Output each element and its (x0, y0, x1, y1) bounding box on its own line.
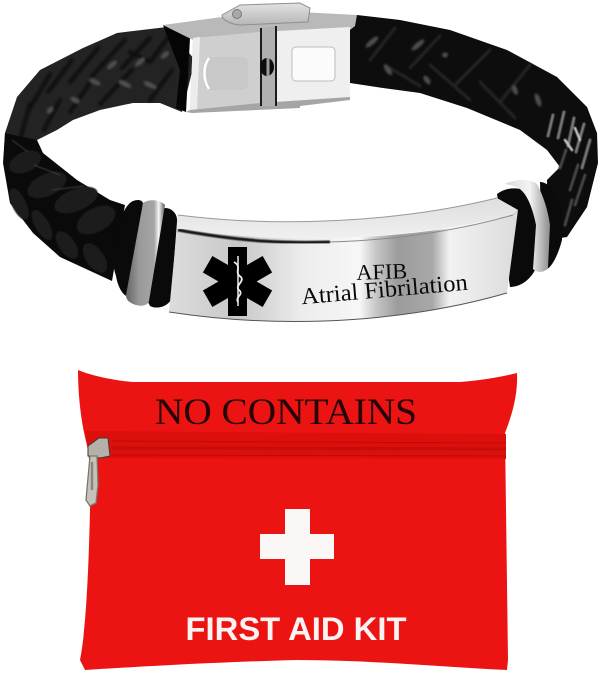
left clasp block (190, 32, 260, 111)
clasp hinge (260, 26, 277, 106)
left rubber rings and metal slider (113, 200, 177, 308)
engraved text: Atrial Fibrilation: Atrial Fibrilation (300, 270, 469, 310)
right rubber rings and metal slider (497, 180, 562, 287)
icon: white cross (260, 509, 334, 585)
leather band: lower left (3, 133, 125, 281)
clasp (163, 3, 357, 113)
bracelet (3, 3, 598, 322)
clasp top hinge (222, 3, 310, 25)
zipper band (85, 431, 506, 459)
label: FIRST AID KIT: FIRST AID KIT (186, 611, 407, 647)
first aid pouch (78, 370, 517, 670)
icon: zipper pull (86, 438, 110, 506)
right clasp block (277, 27, 350, 103)
leather band: upper right (350, 15, 598, 240)
clasp top surface (163, 12, 357, 40)
leather band: upper left (4, 25, 195, 150)
engraved text: AFIB: AFIB (356, 258, 408, 285)
heading: NO CONTAINS: NO CONTAINS (155, 392, 417, 433)
icon: star of life (203, 247, 272, 316)
steel ID plate (169, 198, 518, 322)
clasp windows (204, 57, 248, 90)
